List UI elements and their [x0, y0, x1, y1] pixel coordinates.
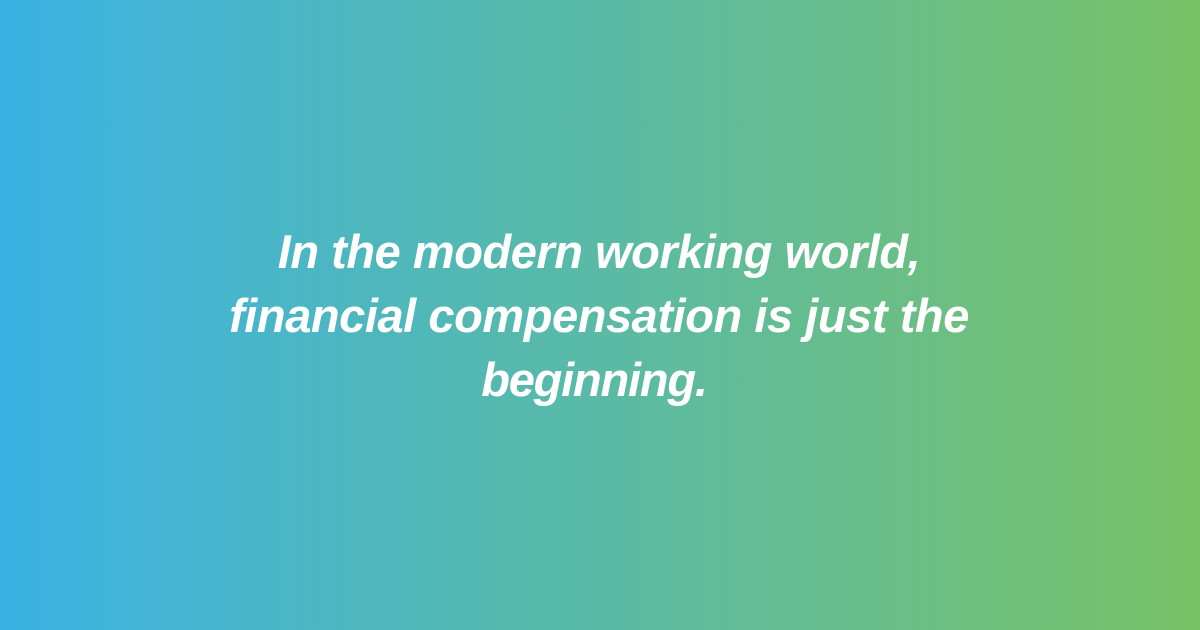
quote text block: In the modern working world,: [278, 225, 920, 278]
quote text block: [229, 225, 969, 406]
quote text block: beginning.: [481, 353, 707, 406]
quote text block: financial compensation is just the: [229, 289, 969, 342]
